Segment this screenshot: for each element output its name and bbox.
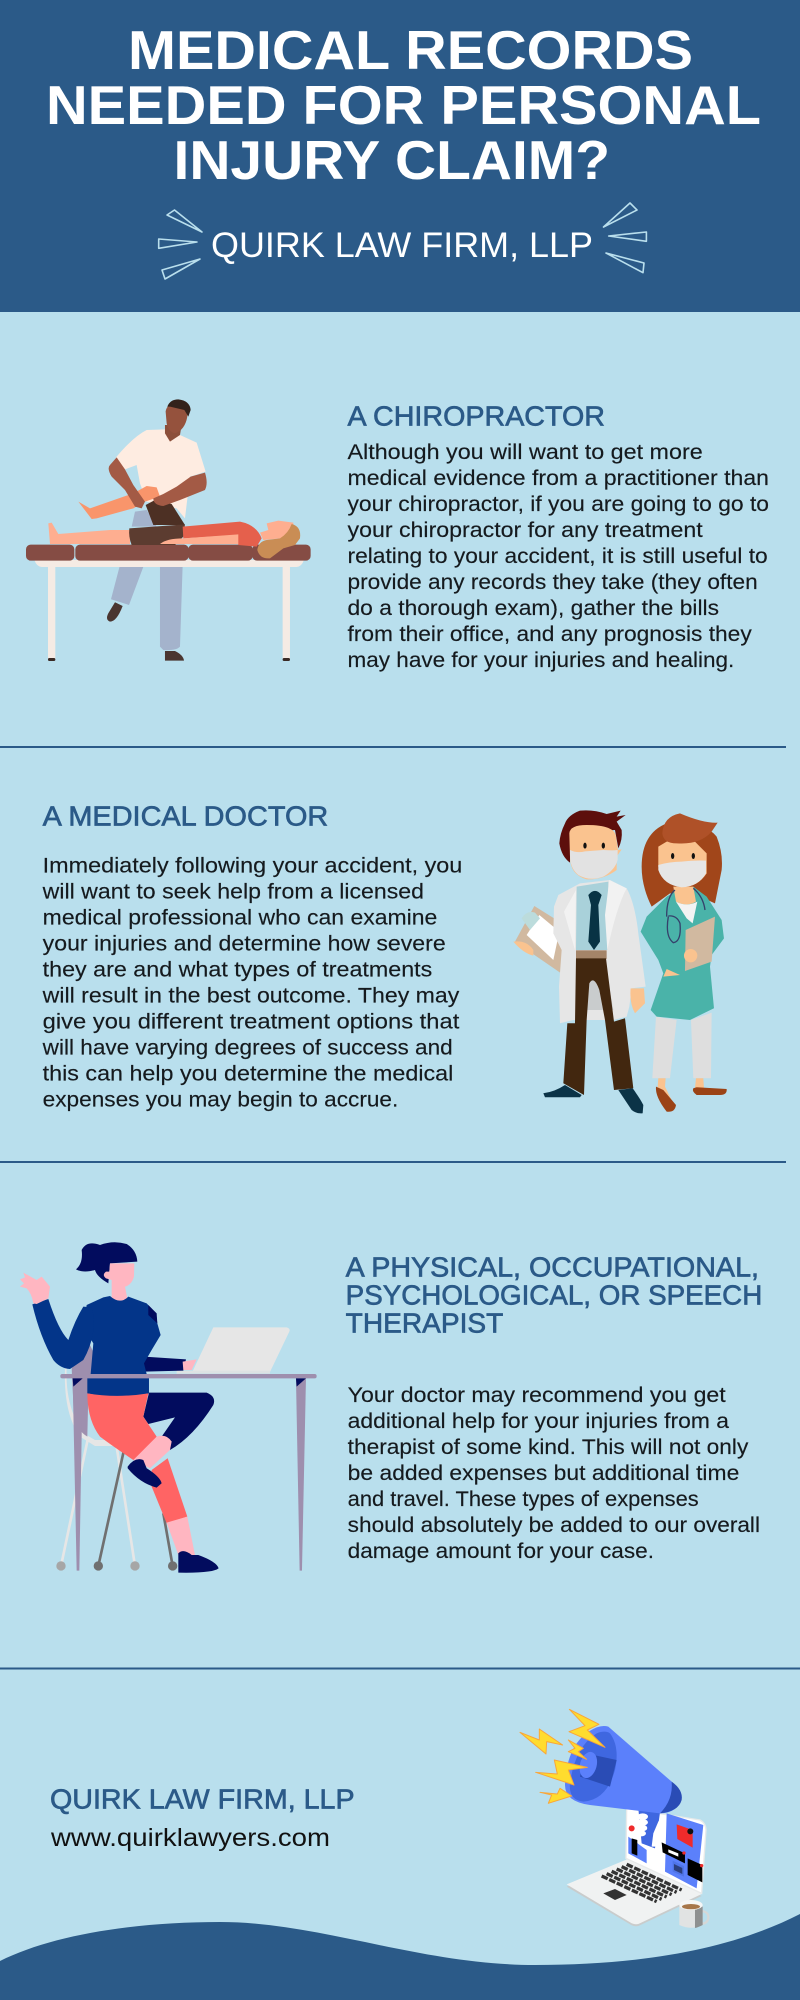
body text: chiropractor: Although you will want to get more [348,440,703,464]
illustration: doctor and nurse in masks [513,810,727,1113]
illustration: megaphone over laptop [520,1709,708,1928]
body text: medical doctor: your injuries and determine how severe [43,932,446,956]
body text: medical doctor: this can help you determine the medical [43,1062,453,1086]
heading: firm name: QUIRK LAW FIRM, LLP [50,1783,355,1814]
illustration: chiropractor treating a patient [26,399,311,661]
female nurse [641,813,727,1112]
body text: therapist: therapist of some kind. This will not only [348,1435,749,1459]
body text: medical doctor: will have varying degrees of success and [42,1036,453,1060]
body text: chiropractor: do a thorough exam), gather the bills [348,596,719,620]
body text: therapist: be added expenses but additional time [348,1461,739,1485]
panel: footer [0,1709,800,2000]
heading: physical, occupational, psychological or speech therapist: PSYCHOLOGICAL, OR SPEECH [346,1279,762,1310]
body text: chiropractor: provide any records they take (they often [348,570,758,594]
body text: chiropractor: your chiropractor, if you are going to go to [348,492,769,516]
panel: medical doctor [42,800,727,1113]
title: INJURY CLAIM? [174,129,610,191]
icon: right sparks [604,203,646,273]
body text: therapist: additional help for your injuries from a [348,1409,729,1433]
body text: chiropractor: relating to your accident, it is still useful to [348,544,768,568]
subtitle: firm name: QUIRK LAW FIRM, LLP [211,226,593,265]
title: NEEDED FOR PERSONAL [46,74,761,136]
body text: therapist: damage amount for your case. [348,1539,654,1563]
title [46,19,761,191]
body text: medical doctor: will want to seek help from a licensed [42,880,424,904]
body text: chiropractor: may have for your injuries and healing. [348,648,734,672]
body text: medical doctor: they are and what types of treatments [43,958,432,982]
male doctor [513,810,646,1113]
illustration: woman working at a desk [20,1242,317,1573]
body text: chiropractor: medical evidence from a practitioner than [348,466,769,490]
heading: physical, occupational, psychological or speech therapist [346,1252,762,1338]
body text: medical doctor: will result in the best outcome. They may [42,984,460,1008]
body text: therapist: Your doctor may recommend you get [348,1383,726,1407]
header banner [0,0,800,312]
wave background [0,1914,800,2000]
panel: chiropractor [26,399,769,672]
body text: therapist: and travel. These types of expenses [348,1487,699,1511]
body text: medical doctor: give you different treatment options that [43,1010,459,1034]
heading: a chiropractor: A CHIROPRACTOR [348,401,605,432]
icon: left sparks [159,210,202,279]
body text: chiropractor: your chiropractor for any treatment [348,518,703,542]
body text: medical doctor: medical professional who can examine [43,906,437,930]
heading: a medical doctor: A MEDICAL DOCTOR [43,800,328,831]
website url: www.quirklawyers.com [50,1824,330,1852]
body text: therapist [348,1383,760,1563]
body text: medical doctor [42,854,462,1112]
body text: therapist: should absolutely be added to our overall [348,1513,760,1537]
panel: therapist [20,1242,762,1573]
body text: chiropractor: from their office, and any prognosis they [348,622,752,646]
body text: medical doctor: Immediately following your accident, you [43,854,462,878]
body text: chiropractor [348,440,769,672]
title: MEDICAL RECORDS [128,19,693,81]
heading: physical, occupational, psychological or speech therapist: A PHYSICAL, OCCUPATIONAL, [346,1252,759,1283]
body text: medical doctor: expenses you may begin to accrue. [43,1088,398,1112]
heading: physical, occupational, psychological or speech therapist: THERAPIST [346,1307,504,1338]
